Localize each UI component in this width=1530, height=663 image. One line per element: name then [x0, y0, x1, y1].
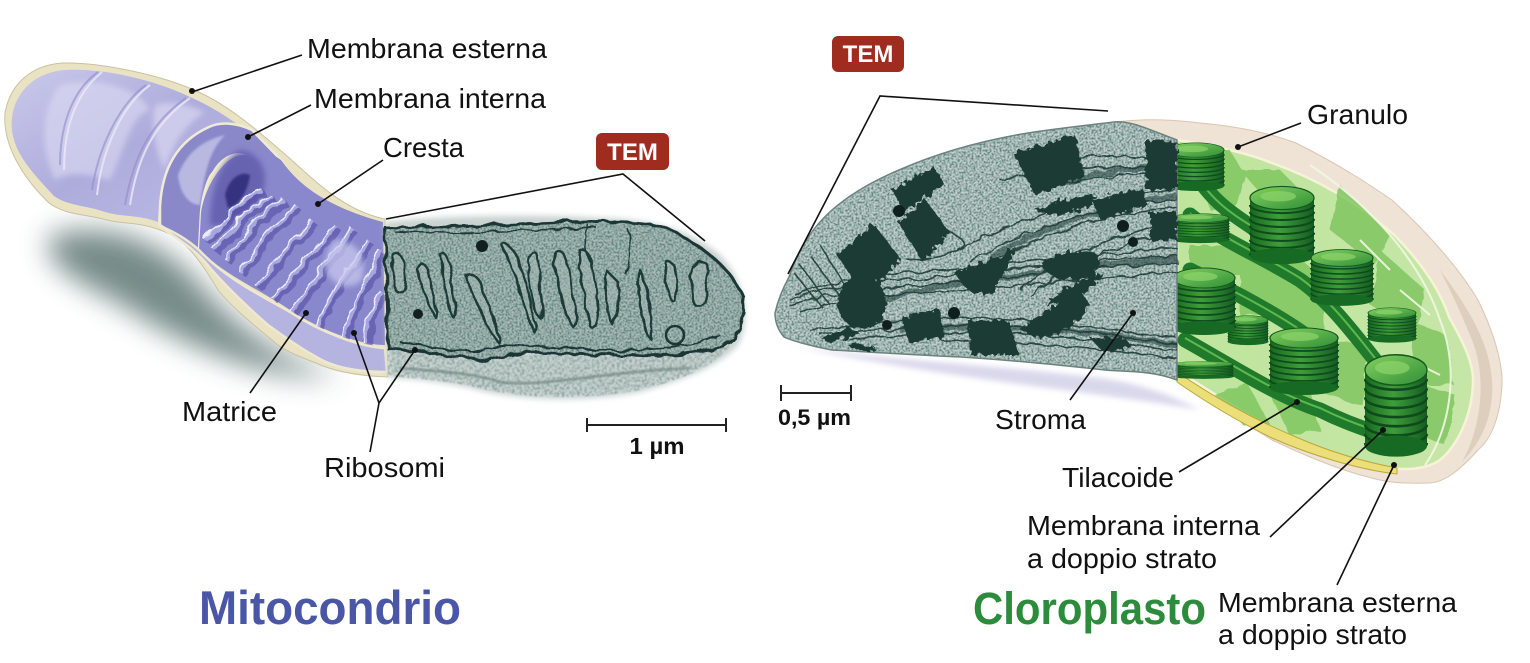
- chloroplast shadow: [790, 345, 1200, 410]
- title: Cloroplasto: Cloroplasto: [973, 583, 1206, 634]
- labels: chloroplast: Membrana esterna: [1218, 587, 1457, 618]
- labels: mitochondrion: Ribosomi: [324, 452, 445, 483]
- chloroplast TEM micrograph: [775, 122, 1177, 380]
- scale bar: 0,5 um: 0,5 µm: [778, 405, 851, 430]
- labels: chloroplast: [995, 99, 1457, 650]
- cristae folds: [204, 189, 385, 347]
- chloroplast illustration: [1114, 120, 1502, 483]
- stroma interior: [1177, 140, 1473, 469]
- labels: chloroplast: Granulo: [1307, 99, 1408, 130]
- labels: chloroplast: Tilacoide: [1062, 462, 1174, 493]
- cast shadow: [49, 230, 340, 377]
- granum dark blocks: [820, 135, 1177, 355]
- TEM badge: chloroplast: [832, 36, 904, 72]
- scale bar: 1 um: [587, 418, 726, 459]
- labels: chloroplast: Stroma: [995, 404, 1086, 435]
- labels: mitochondrion: Matrice: [182, 396, 277, 427]
- labels: mitochondrion: Cresta: [383, 132, 464, 163]
- thylakoid lamellae bands: [1185, 165, 1395, 440]
- labels: chloroplast: Membrana interna: [1027, 510, 1260, 541]
- lamellae: [790, 156, 1177, 358]
- background lamellae: [1190, 150, 1455, 445]
- labels: mitochondrion: Membrana esterna: [307, 33, 547, 64]
- labels: mitochondrion: Membrana interna: [314, 83, 546, 114]
- thick lamellae bundles: [880, 167, 1177, 345]
- TEM badge: mitochondrion: [596, 133, 669, 170]
- outer membrane body: [5, 63, 388, 377]
- mitochondrion illustration: [5, 63, 388, 377]
- outer lavender surface: [12, 70, 252, 222]
- cristae interior: [199, 153, 385, 345]
- matrix: [385, 222, 744, 360]
- granum stacks: [1168, 143, 1224, 191]
- labels: chloroplast: a doppio strato: [1218, 619, 1407, 650]
- yellow band: [1177, 372, 1397, 474]
- leader dots: [189, 88, 1397, 468]
- TEM badge: mitochondrion: TEM: [607, 139, 658, 166]
- ribosome spots: [476, 240, 488, 252]
- lower lavender band: [160, 226, 387, 372]
- scale bar: 1 um: 1 µm: [630, 433, 684, 459]
- outer envelope: [1114, 120, 1502, 483]
- inner membrane wall: [160, 124, 281, 250]
- leader lines: [192, 55, 1394, 585]
- mitochondrion TEM micrograph: [385, 216, 745, 399]
- fuzzy outer halo: [385, 216, 745, 399]
- scale bar: 0,5 um: [778, 385, 851, 430]
- labels: chloroplast: a doppio strato: [1027, 543, 1217, 574]
- title: Mitocondrio: Mitocondrio: [199, 581, 461, 634]
- labels: mitochondrion: [182, 33, 547, 483]
- membrane and cristae in micrograph: [385, 222, 744, 360]
- TEM badge: chloroplast: TEM: [843, 41, 893, 68]
